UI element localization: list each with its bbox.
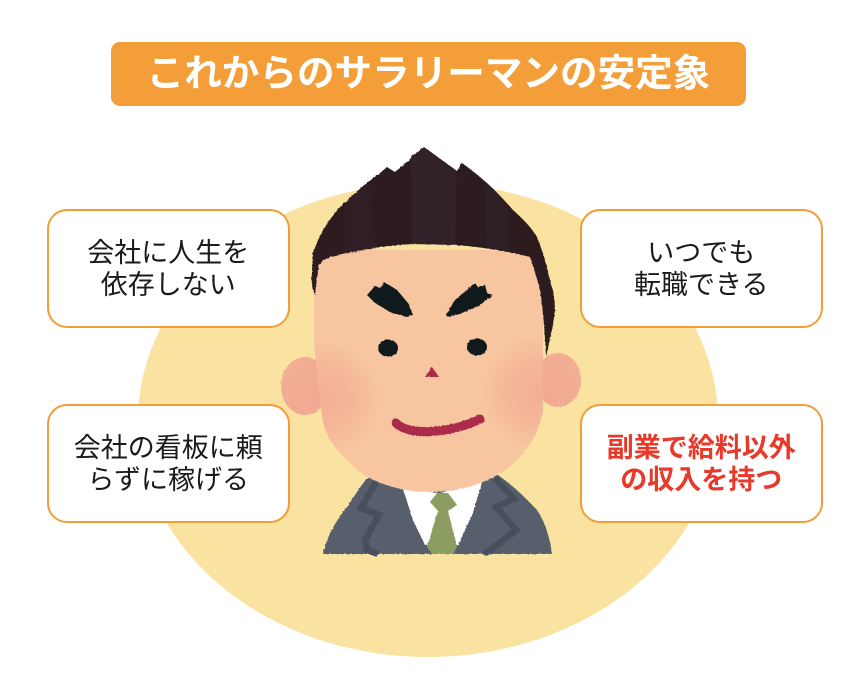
title banner: これからのサラリーマンの安定象: [147, 52, 710, 94]
callout: top right: 転職できる: [634, 270, 768, 300]
nose: [425, 367, 439, 377]
businessman: [262, 147, 596, 554]
callout: top left: [46, 208, 290, 328]
title banner: [111, 42, 746, 106]
callout: bottom left: 会社の看板に頼: [74, 433, 263, 463]
suit jacket: [323, 475, 552, 554]
left eyebrow: [367, 282, 413, 317]
face: [314, 250, 543, 492]
callout: top left: 依存しない: [101, 270, 236, 300]
yellow background circle: [138, 183, 718, 657]
callout: bottom left: [46, 404, 290, 523]
cheek blush: [293, 348, 568, 440]
illustration: yellow circle and businessman: [138, 147, 718, 657]
necktie: [427, 493, 457, 554]
mouth: [396, 419, 480, 432]
right ear: [535, 353, 581, 407]
shirt: [403, 482, 482, 545]
callout: bottom right, highlighted: [580, 404, 823, 523]
callout: bottom left: らずに稼げる: [88, 465, 249, 495]
hair stripes: [345, 148, 510, 254]
right eyebrow: [446, 283, 493, 317]
left ear: [281, 357, 329, 415]
callout: top right: [580, 208, 823, 328]
left eye: [378, 340, 398, 356]
callout: bottom right, highlighted: の収入を持つ: [620, 465, 782, 495]
callout: top left: 会社に人生を: [87, 238, 249, 268]
lapel lines: [361, 478, 516, 554]
callout: top right: いつでも: [647, 238, 755, 268]
callout: bottom right, highlighted: 副業で給料以外: [607, 433, 796, 463]
right eye: [467, 338, 487, 356]
hair: [312, 147, 555, 357]
